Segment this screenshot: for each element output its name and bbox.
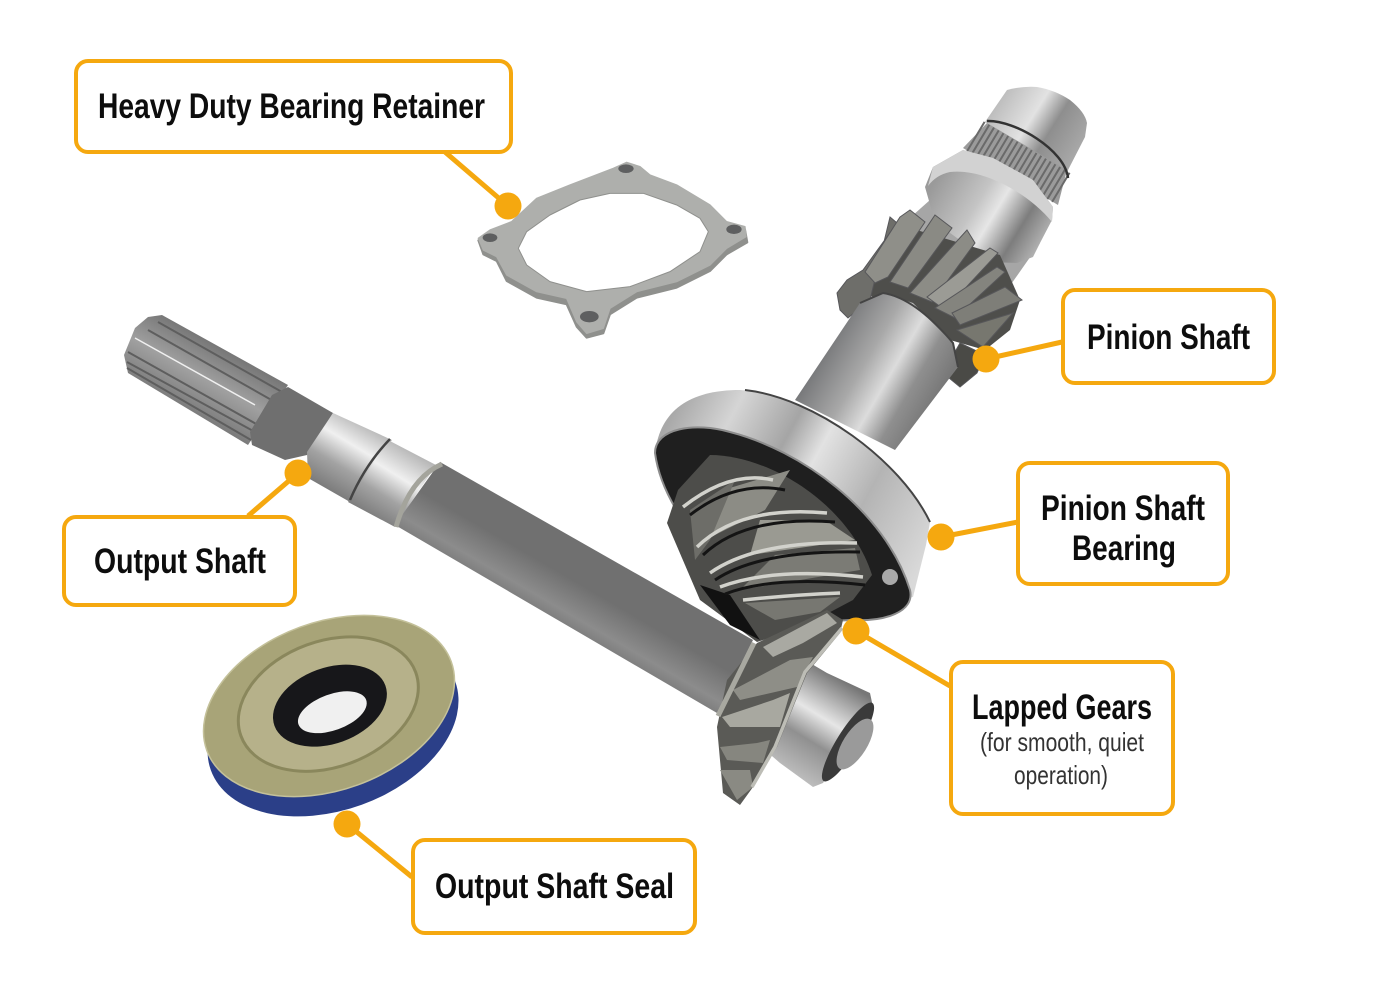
top journal — [985, 87, 1087, 172]
black rubber lip — [262, 650, 398, 762]
main shaft — [795, 293, 958, 450]
plain neck — [250, 387, 333, 460]
callout: pinion shaft — [972, 290, 1274, 383]
pilot bearing nose — [765, 660, 882, 787]
output shaft — [124, 315, 753, 713]
pinion gear head — [667, 455, 872, 642]
helical gear teeth — [837, 210, 1022, 387]
collar neck — [885, 200, 1040, 300]
bearing open face — [655, 427, 911, 620]
splined section — [963, 123, 1067, 205]
inner recessed ring — [219, 613, 437, 795]
bearing retainer plate — [478, 162, 747, 338]
callout: output shaft seal — [334, 810, 695, 933]
splined end — [124, 315, 288, 445]
blue outer casing — [182, 602, 484, 849]
callout: pinion shaft bearing: Pinion Shaft — [1041, 489, 1205, 528]
collar — [925, 150, 1053, 263]
tan outer face — [178, 583, 480, 829]
callout: pinion shaft bearing — [928, 463, 1228, 584]
callout: lapped gears: Lapped Gears — [972, 688, 1152, 727]
centre hole — [292, 683, 372, 741]
callout: output shaft seal: Output Shaft Seal — [435, 867, 674, 906]
pinion shaft bearing — [655, 390, 930, 642]
callout: lapped gears: operation) — [1014, 760, 1108, 790]
callout: lapped gears: (for smooth, quiet — [980, 727, 1145, 757]
long tube — [395, 462, 753, 713]
output shaft seal — [175, 583, 487, 849]
callout: heavy duty bearing retainer: Heavy Duty Bearing Retainer — [98, 87, 485, 126]
callout: output shaft — [64, 460, 312, 605]
pinion shaft — [795, 87, 1087, 450]
bearing ball — [882, 569, 898, 585]
callout: heavy duty bearing retainer — [76, 61, 522, 220]
callout: pinion shaft: Pinion Shaft — [1087, 318, 1250, 357]
callout: pinion shaft bearing: Bearing — [1072, 529, 1176, 568]
callout: lapped gears — [842, 618, 1173, 814]
callout: output shaft: Output Shaft — [94, 542, 266, 581]
output bevel gear — [717, 610, 843, 805]
bearing outer band — [655, 390, 930, 610]
polished collars — [307, 413, 392, 502]
